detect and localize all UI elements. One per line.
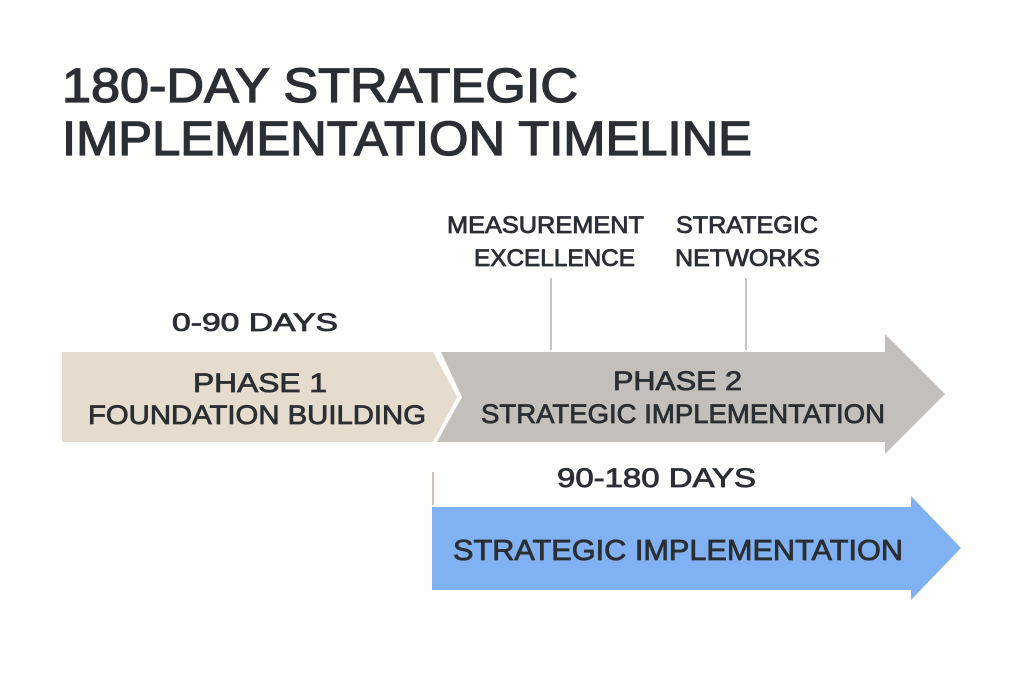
milestone: strategic networks [675,212,820,350]
arrow: strategic implementation [432,496,961,600]
milestone: strategic networks: NETWORKS [675,245,820,272]
milestone: measurement excellence: MEASUREMENT [447,212,644,239]
arrow: phase 2 [437,334,945,454]
milestone: measurement excellence: EXCELLENCE [474,245,635,272]
arrow: phase 2: PHASE 2 [613,366,742,396]
title [62,60,752,166]
arrow: phase 1: FOUNDATION BUILDING [88,400,426,430]
arrow: phase 1: PHASE 1 [193,368,327,398]
arrow: phase 1 [62,352,457,442]
title: IMPLEMENTATION TIMELINE [62,113,752,166]
arrow: phase 2: STRATEGIC IMPLEMENTATION [481,399,885,429]
arrow: strategic implementation: STRATEGIC IMPLEMENTATION [453,535,903,567]
title: 180-DAY STRATEGIC [62,60,578,113]
milestone: strategic networks: STRATEGIC [676,212,818,239]
milestone: measurement excellence [447,212,644,350]
label: 0-90 days: 0-90 DAYS [172,309,338,337]
label: 90-180 days: 90-180 DAYS [557,463,756,493]
